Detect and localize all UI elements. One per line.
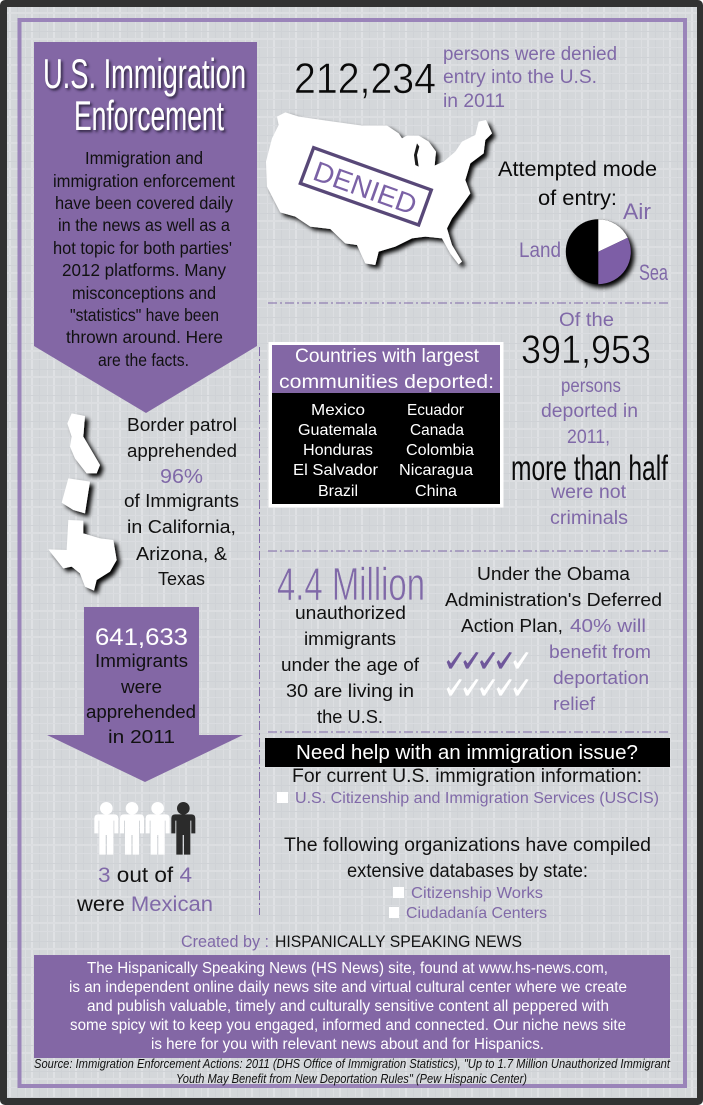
panel: about HS News xyxy=(34,955,670,1058)
text: deferred action plan: Administration's Deferred xyxy=(445,589,662,610)
stat: persons deported: persons xyxy=(561,376,621,397)
panel: about HS News: is here for you with relevant news about and for Hispanics. xyxy=(151,1036,544,1053)
text: 3 out of 4 were Mexican xyxy=(76,864,213,916)
panel: about HS News: and publish valuable, timely and culturally sensitive content all peppered with xyxy=(87,998,609,1015)
intro text: 2012 platforms. Many xyxy=(62,260,226,280)
stat: persons denied: 212,234 xyxy=(294,55,436,103)
stat: persons denied xyxy=(294,44,617,112)
text: deferred action plan: Under the Obama xyxy=(477,563,631,584)
intro text: misconceptions and xyxy=(72,283,216,303)
country list: El Salvador xyxy=(293,462,379,479)
panel heading: Countries with largest xyxy=(295,346,480,367)
stat: persons deported: deported in xyxy=(541,401,638,422)
heading: attempted mode of entry xyxy=(498,158,657,210)
intro text: are the facts. xyxy=(98,350,189,370)
heading: attempted mode of entry: of entry: xyxy=(538,187,617,210)
intro text: "statistics" have been xyxy=(70,305,219,325)
source note xyxy=(34,1057,670,1086)
dashed dividers xyxy=(260,303,670,915)
intro text: Immigration and xyxy=(85,148,203,168)
arrow: immigrants apprehended: Immigrants xyxy=(95,650,188,671)
credit line: HISPANICALLY SPEAKING NEWS xyxy=(275,932,522,951)
text: deferred action plan: relief xyxy=(553,693,596,714)
source note: Youth May Benefit from New Deportation Rules" (Pew Hispanic Center) xyxy=(176,1072,527,1086)
arrow: immigrants apprehended xyxy=(47,607,243,782)
stat: persons denied: persons were denied xyxy=(443,44,617,65)
text: border patrol stat: apprehended xyxy=(127,440,237,461)
pie chart: mode of entry xyxy=(519,199,669,285)
panel: need help: Need help with an immigration issue? xyxy=(296,742,638,764)
stat: 4.4 million: the U.S. xyxy=(317,706,383,727)
text: border patrol stat: in California, xyxy=(127,516,236,537)
heading: attempted mode of entry: Attempted mode xyxy=(498,158,657,181)
arrow: immigrants apprehended: were xyxy=(120,676,162,697)
stat: persons denied: in 2011 xyxy=(443,91,505,112)
credit line xyxy=(181,932,522,951)
stat: 4.4 million: under the age of xyxy=(281,654,420,675)
panel: need help: Ciudadanía Centers xyxy=(406,905,547,922)
panel: need help: For current U.S. immigration information: xyxy=(292,766,642,787)
text: border patrol stat: Arizona, & xyxy=(136,543,228,564)
title: U.S. Immigration xyxy=(43,50,246,97)
intro text: immigration enforcement xyxy=(53,171,235,191)
text: deferred action plan: 40% will xyxy=(570,615,646,636)
stat: persons denied: entry into the U.S. xyxy=(443,67,597,88)
text: border patrol stat: of Immigrants xyxy=(124,490,239,511)
panel: need help: The following organizations have compiled xyxy=(284,835,651,856)
intro text: in the news as well as a xyxy=(58,215,230,235)
text: deferred action plan: Action Plan, xyxy=(461,615,563,636)
text: border patrol stat xyxy=(124,414,239,589)
panel: intro banner xyxy=(34,42,257,413)
stat: persons deported: were not xyxy=(550,482,627,503)
credit line: Created by : xyxy=(181,932,269,951)
stat: 4.4 million: unauthorized xyxy=(295,602,406,623)
panel: about HS News: some spicy wit to keep you engaged, informed and connected. Our niche news site xyxy=(70,1017,626,1034)
country list: China xyxy=(415,483,457,500)
map: United States with denied stamp xyxy=(266,112,492,265)
country list: Colombia xyxy=(406,442,474,459)
country list: Nicaragua xyxy=(399,462,473,479)
country list: Guatemala xyxy=(298,422,377,439)
text: deferred action plan: benefit from xyxy=(549,641,651,662)
arrow: immigrants apprehended: apprehended xyxy=(86,701,196,722)
pie chart: mode of entry: Air xyxy=(623,199,651,224)
panel heading xyxy=(279,346,494,393)
country list: Mexico xyxy=(311,402,365,419)
stat: persons deported: 391,953 xyxy=(521,328,651,372)
country list: Canada xyxy=(410,422,464,439)
panel: need help: U.S. Citizenship and Immigration Services (USCIS) xyxy=(295,790,659,807)
stat: 4.4 million: immigrants xyxy=(304,628,396,649)
stat: persons deported xyxy=(511,310,668,529)
stat: persons deported: Of the xyxy=(559,310,614,331)
pie chart: mode of entry: Sea xyxy=(639,260,669,285)
country list xyxy=(293,402,474,500)
intro text: have been covered daily xyxy=(55,193,233,213)
denied stamp: DENIED xyxy=(309,155,421,221)
text: 3 out of 4 were Mexican: 3 out of 4 xyxy=(98,864,192,887)
panel: about HS News: The Hispanically Speaking News (HS News) site, found at www.hs-news.com, xyxy=(87,960,608,977)
text: border patrol stat: Border patrol xyxy=(127,414,237,435)
text: border patrol stat: Texas xyxy=(158,568,205,589)
text: deferred action plan xyxy=(445,563,662,714)
stat: 4.4 million xyxy=(277,558,425,727)
intro text: thrown around. Here xyxy=(66,327,223,347)
intro text xyxy=(53,148,235,370)
panel: countries deported xyxy=(268,342,504,508)
stat: 4.4 million: 30 are living in xyxy=(286,680,414,701)
pie chart: mode of entry: Land xyxy=(519,239,561,262)
title xyxy=(43,50,246,139)
panel: need help: extensive databases by state: xyxy=(347,861,588,882)
text: 3 out of 4 were Mexican: were Mexican xyxy=(76,893,213,916)
country list: Ecuador xyxy=(407,402,465,419)
panel heading: communities deported: xyxy=(279,372,494,393)
text: border patrol stat: 96% xyxy=(160,466,203,488)
icon: border states xyxy=(48,413,117,591)
country list: Honduras xyxy=(303,442,373,459)
arrow: immigrants apprehended: in 2011 xyxy=(108,726,175,747)
intro text: hot topic for both parties' xyxy=(53,238,232,258)
text: deferred action plan: deportation xyxy=(553,667,649,688)
panel: about HS News: is an independent online daily news site and virtual cultural center where we create xyxy=(69,979,627,996)
panel: need help xyxy=(265,738,670,922)
stat: 4.4 million: 4.4 Million xyxy=(277,558,425,610)
country list: Brazil xyxy=(318,483,358,500)
title: Enforcement xyxy=(74,92,224,139)
panel: need help: Citizenship Works xyxy=(411,885,543,902)
stat: persons deported: 2011, xyxy=(567,427,610,448)
icon: four people xyxy=(94,802,195,855)
icon: check marks, 40 percent xyxy=(447,652,529,696)
arrow: immigrants apprehended: 641,633 xyxy=(95,624,188,651)
stat: persons deported: criminals xyxy=(550,508,628,529)
